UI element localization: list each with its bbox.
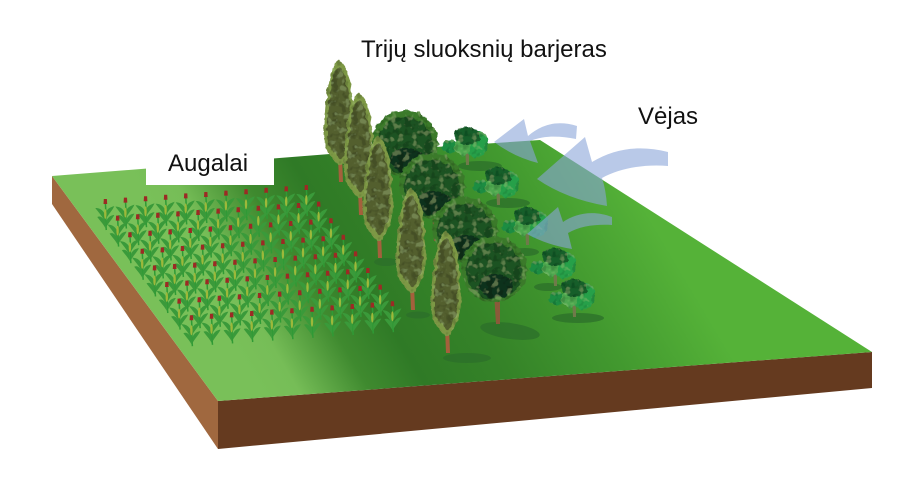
tree shadows: [374, 161, 604, 363]
poplar row: [324, 60, 461, 353]
arrow: large: [537, 137, 668, 206]
grass surface: [52, 140, 872, 401]
arrow: small upper: [494, 119, 577, 163]
three-layer tree barrier: [324, 60, 596, 353]
soil front side: [218, 352, 872, 449]
field block: [52, 140, 872, 449]
crop rows: [95, 185, 401, 346]
arrow: lower: [527, 207, 612, 249]
label: crops: Augalai: [168, 150, 248, 177]
label: barrier: Trijų sluoksnių barjeras: [361, 36, 607, 63]
label: wind: Vėjas: [638, 103, 698, 130]
shrub row: [441, 127, 596, 317]
label background: [146, 150, 274, 185]
soil left side: [52, 176, 218, 449]
round tree row: [372, 110, 527, 324]
wind arrows: [494, 119, 668, 249]
